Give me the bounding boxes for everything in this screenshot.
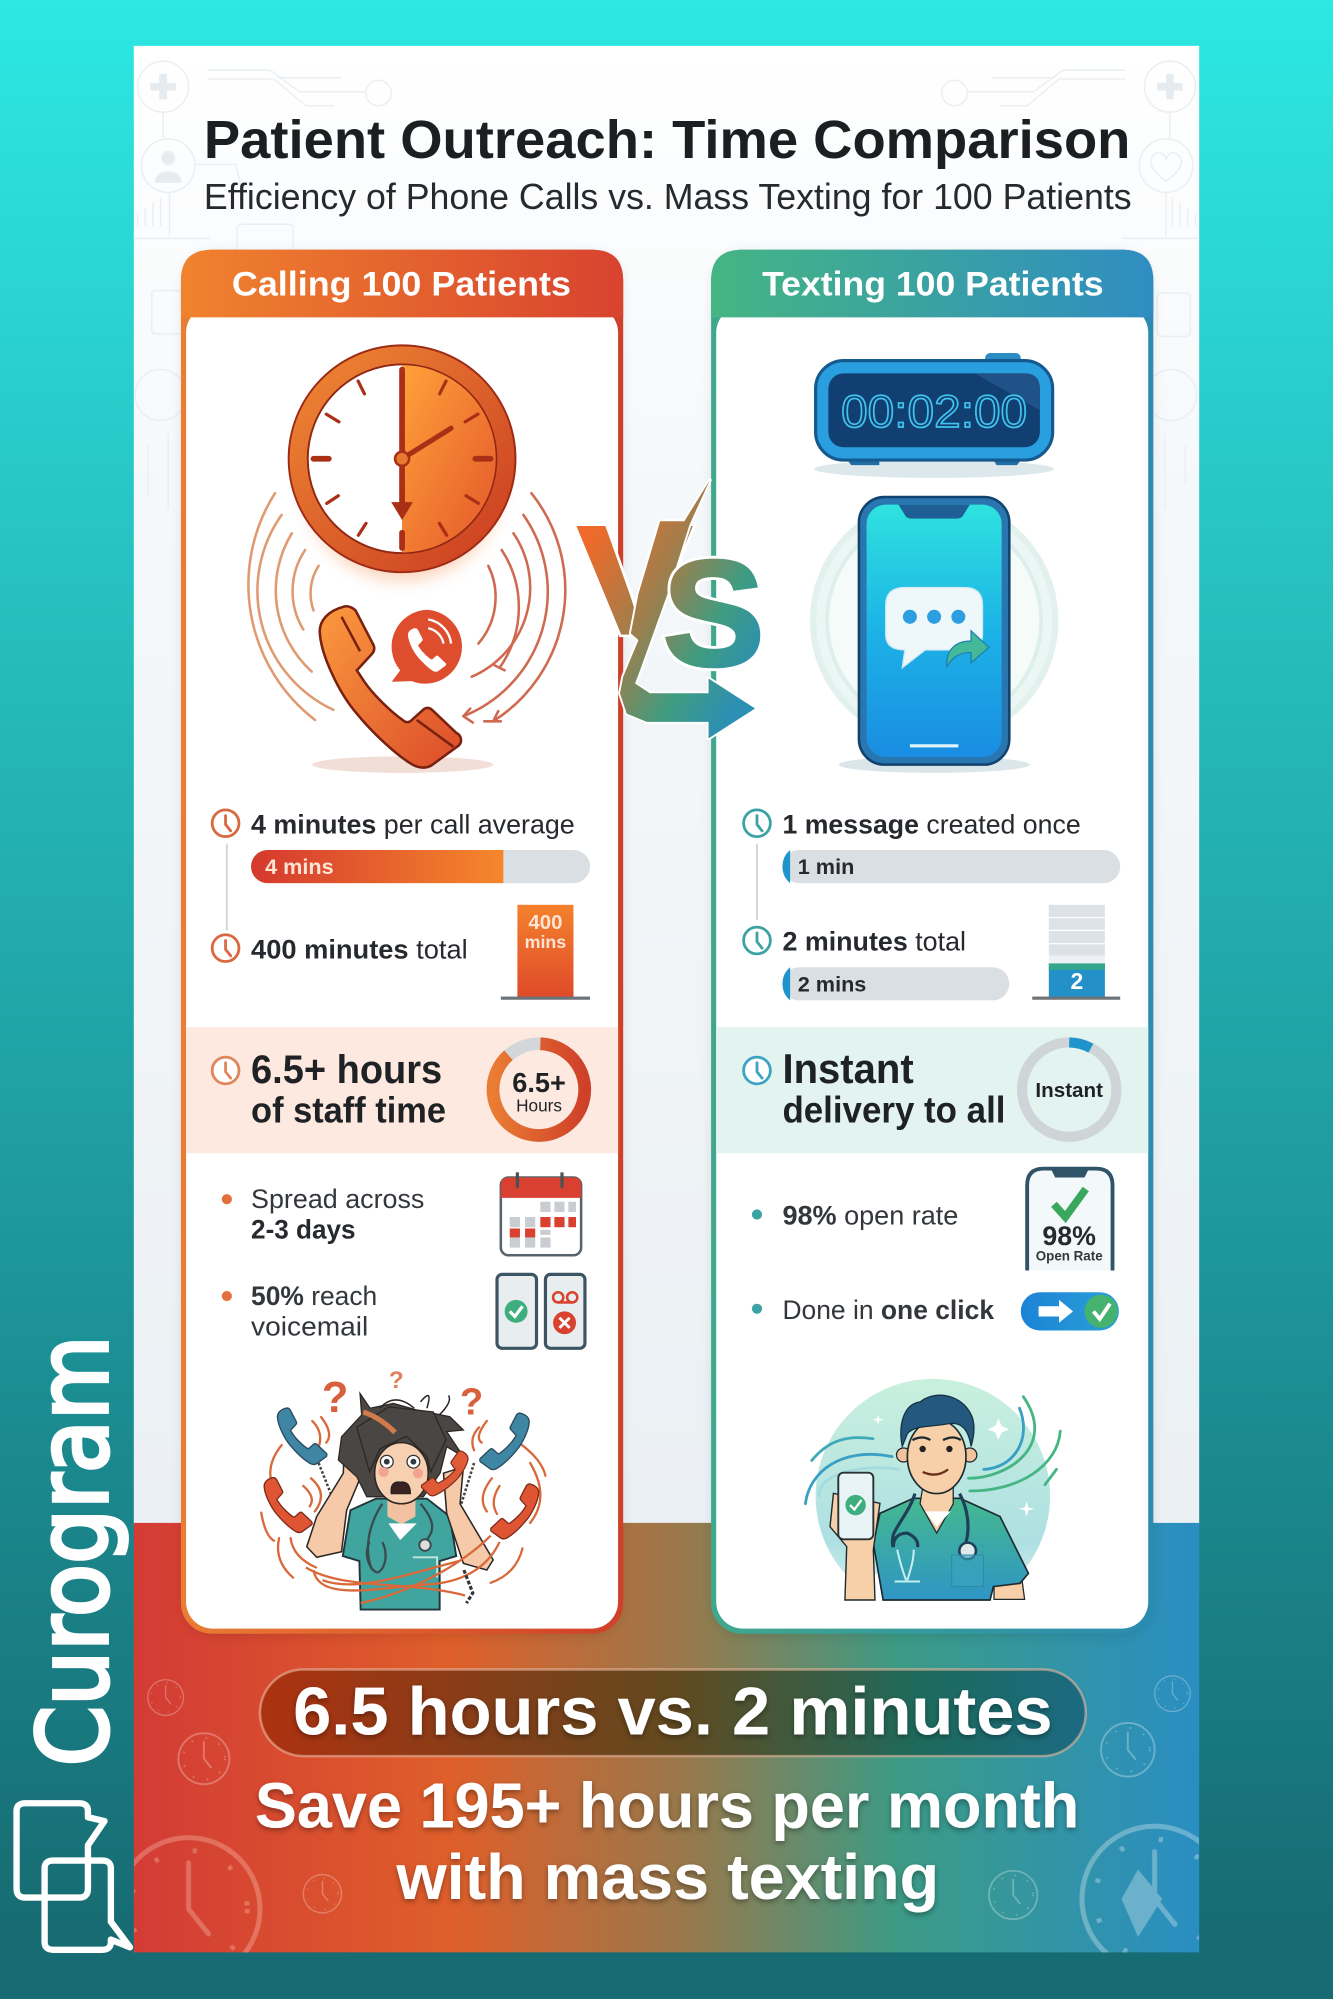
icon: digital timer 00:02:00: 00:02:00 [841, 385, 1027, 437]
callout: 6.5+ hours of staff time: Hours [516, 1095, 562, 1115]
bullet: 50% reach voicemail: voicemail [251, 1312, 368, 1342]
vs graphic with arrow [577, 480, 765, 738]
bar: 2 mins [782, 967, 1009, 1000]
bullet: spread across 2-3 days: 2-3 days [251, 1215, 356, 1245]
title: Patient Outreach: Time Comparison [204, 111, 1130, 170]
bar: 400 mins column [501, 905, 590, 1000]
vs graphic with arrow: S [663, 529, 765, 697]
callout: 6.5+ hours of staff time [186, 1027, 618, 1153]
callout: 6.5+ hours of staff time: of staff time [251, 1091, 446, 1131]
bar: 2 mins stacked column [1032, 905, 1120, 1000]
brand wordmark: Curogram: Curogram [17, 1336, 130, 1766]
header: calling [181, 250, 623, 317]
icon: smartphone with message bubble [813, 497, 1055, 773]
callout: instant delivery to all: Instant [782, 1045, 914, 1092]
infographic upper panel background [134, 46, 1199, 1524]
callout: instant delivery to all: Instant [1035, 1080, 1103, 1102]
icon: phones with check and voicemail [497, 1274, 585, 1348]
vs graphic with arrow: V [577, 493, 692, 666]
icon: ringing sound waves [248, 493, 565, 723]
bullet: done in one click: Done in one click [782, 1295, 994, 1325]
stat: 2 minutes total: 2 minutes total [782, 927, 966, 957]
callout: 6.5+ hours of staff time: 6.5+ [512, 1067, 566, 1098]
icon: red telephone handset [312, 606, 493, 773]
illustration: stressed nurse with ringing phones: ? [460, 1381, 483, 1424]
illustration: calm nurse holding phone [805, 1379, 1060, 1618]
icon: one click toggle [1021, 1292, 1119, 1330]
panel: texting 100 patients [711, 250, 1153, 1634]
icon: orange clock [289, 345, 515, 581]
header: calling: Calling 100 Patients [232, 266, 571, 304]
banner text: save 195+ hours per month with mass texting [255, 1769, 1079, 1913]
stat: 1 message created once: 1 message created once [782, 809, 1081, 839]
stat: 400 minutes total: 400 minutes total [251, 934, 468, 964]
banner text: save 195+ hours per month with mass texting: Save 195+ hours per month [255, 1769, 1079, 1841]
stat: 1 message created once [744, 809, 1081, 920]
illustration: stressed nurse with ringing phones [261, 1367, 545, 1610]
bullet: 50% reach voicemail [222, 1281, 377, 1342]
panel: calling 100 patients [181, 250, 623, 1634]
bottom gradient band [117, 1523, 1227, 1980]
bar: 2 mins: 2 mins [798, 971, 866, 996]
bullet: spread across 2-3 days: Spread across [251, 1184, 424, 1214]
bullet: 50% reach voicemail: 50% reach [251, 1281, 377, 1311]
bar: 1 min [782, 850, 1120, 883]
icon: speech bubble with phone [392, 610, 462, 684]
icon: phone with 98% open rate: Open Rate [1036, 1248, 1103, 1263]
stat: 4 minutes per call: 4 minutes per call average [251, 809, 575, 839]
bar: 4 mins: 4 mins [265, 854, 334, 879]
bullet: 98% open rate: 98% open rate [782, 1201, 958, 1231]
header: texting [711, 250, 1153, 317]
icon: phone with 98% open rate: 98% [1042, 1221, 1096, 1251]
illustration: stressed nurse with ringing phones: ? [389, 1367, 404, 1394]
bar: 1 min: 1 min [798, 854, 854, 879]
brand logo: chat bubbles [17, 1803, 130, 1950]
vs graphic with arrow: V [577, 493, 692, 666]
subtitle: Efficiency of Phone Calls vs. Mass Texting for 100 Patients [204, 177, 1132, 217]
icon: digital timer 00:02:00 [814, 353, 1054, 478]
banner text: save 195+ hours per month with mass texting: with mass texting [395, 1841, 939, 1913]
callout: instant delivery to all [716, 1027, 1148, 1153]
callout: 6.5+ hours of staff time: 6.5+ hours [251, 1048, 442, 1092]
callout: instant delivery to all: delivery to all [782, 1090, 1005, 1131]
bar: 400 mins column: mins [525, 932, 566, 952]
bar: 400 mins column: 400 [528, 912, 562, 934]
bar: 2 mins stacked column: 2 [1070, 968, 1083, 994]
icon: calendar [501, 1172, 581, 1255]
illustration: stressed nurse with ringing phones: ? [322, 1374, 348, 1422]
header: texting: Texting 100 Patients [762, 266, 1104, 304]
bar: 4 mins [251, 850, 590, 883]
banner pill: 6.5 hours vs. 2 minutes: 6.5 hours vs. 2 minutes [293, 1674, 1053, 1749]
icon: phone with 98% open rate [1027, 1169, 1113, 1271]
stat: 4 minutes per call [212, 809, 575, 930]
vs graphic with arrow: S [663, 529, 765, 697]
bullet: spread across 2-3 days [222, 1184, 424, 1245]
